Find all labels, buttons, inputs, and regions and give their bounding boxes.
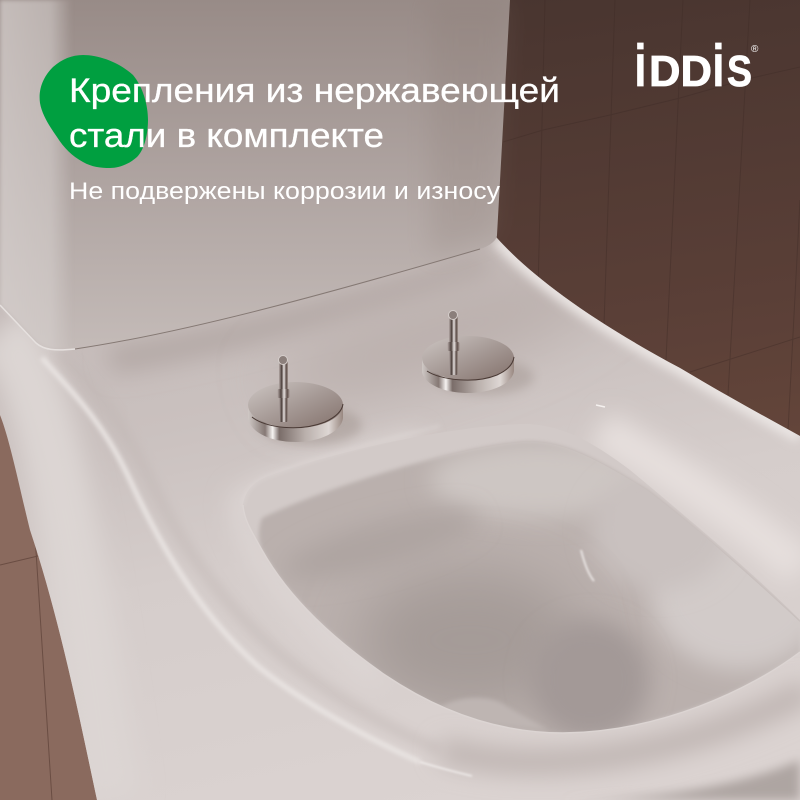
- brand logo: [634, 32, 759, 99]
- side ridge: [42, 358, 420, 762]
- bowl rim recess: [243, 424, 800, 733]
- lower-left wall tiles: [0, 400, 110, 800]
- tank: [0, 0, 510, 350]
- green accent blob: [40, 55, 148, 168]
- heading: Крепления из нержавеющей: [69, 72, 560, 110]
- deck and bowl body: [0, 225, 800, 800]
- brand logo: ®: [751, 44, 759, 55]
- brand logo: S: [727, 47, 752, 96]
- heading: стали в комплекте: [69, 117, 384, 155]
- bowl: [243, 424, 800, 740]
- brand logo: i: [634, 32, 646, 99]
- brand logo: i: [712, 32, 724, 99]
- brand logo: DD: [649, 47, 712, 96]
- subtitle: Не подвержены коррозии и износу: [69, 178, 500, 205]
- body shading: [0, 238, 800, 800]
- hardware: right chrome mount: [422, 310, 534, 395]
- wall tile joints: [503, 0, 800, 450]
- bowl interior: [259, 442, 800, 740]
- hardware: left chrome mount: [248, 356, 362, 445]
- bowl lip highlight: [243, 505, 800, 733]
